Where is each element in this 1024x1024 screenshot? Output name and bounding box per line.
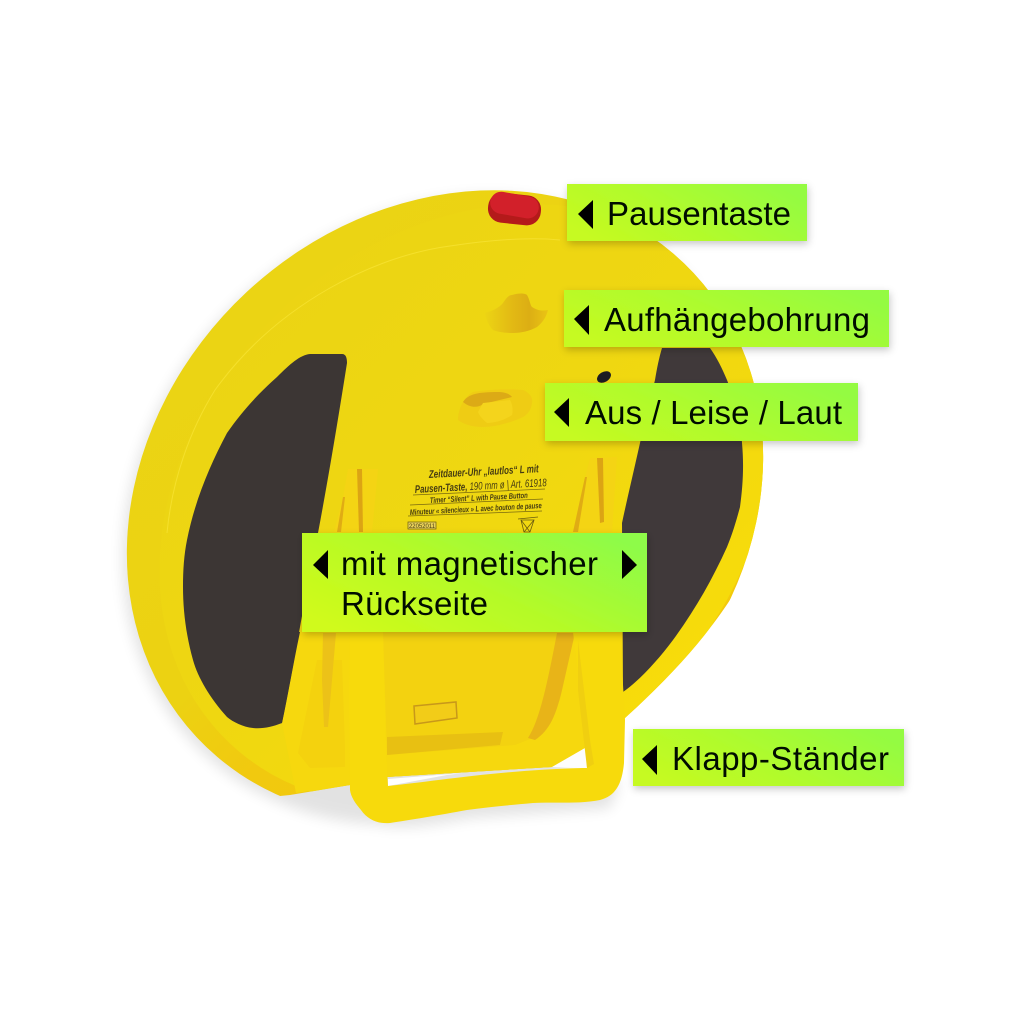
arrow: Klapp-Ständer — [642, 745, 657, 775]
front face — [209, 241, 764, 792]
lower left strut recess — [298, 633, 345, 768]
label: Aufhängebohrung — [564, 290, 889, 347]
small dark hole — [595, 369, 613, 385]
label: Aufhängebohrung: Aufhängebohrung — [604, 301, 870, 338]
arrow: Aufhängebohrung — [574, 305, 589, 335]
plate shading bands — [383, 632, 575, 755]
hanging hole — [485, 294, 548, 333]
right strut — [573, 457, 617, 532]
label: mit magnetischer Rückseite: mit magnetischer — [341, 545, 598, 582]
product text: Timer “Silent” L with Pause Button — [430, 491, 528, 505]
re-drawn left panel lower tip — [240, 632, 300, 728]
pause button — [487, 190, 542, 227]
stand inner plate — [282, 632, 622, 793]
right magnet panel — [622, 348, 743, 692]
product text — [410, 463, 548, 517]
arrow: Aus / Leise / Laut — [554, 398, 569, 427]
label: Klapp-Ständer: Klapp-Ständer — [672, 740, 889, 777]
label: mit magnetischer Rückseite: Rückseite — [341, 585, 488, 622]
outer rim — [126, 190, 764, 796]
product text: Pausen-Taste, 190 mm ø | Art. 61918 — [415, 477, 548, 496]
clock body — [126, 190, 764, 796]
label: Klapp-Ständer — [633, 729, 904, 786]
stand catch — [414, 702, 457, 724]
label: mit magnetischer Rückseite — [302, 533, 647, 632]
left strut — [334, 469, 378, 532]
recycling icon — [518, 517, 538, 532]
label: Pausentaste — [567, 184, 807, 241]
body rim line — [167, 239, 560, 533]
frame inner ridge right — [578, 640, 594, 768]
arrow: left — [313, 550, 328, 579]
left magnet panel — [183, 354, 347, 728]
article code box: 22052011 — [409, 523, 435, 530]
label: Aus / Leise / Laut — [545, 383, 858, 441]
arrow: Pausentaste — [578, 200, 593, 229]
white gap right — [552, 748, 587, 768]
slide switch — [458, 389, 532, 427]
product text: Zeitdauer-Uhr „lautlos“ L mit — [428, 463, 540, 481]
product text: Minuteur « silencieux » L avec bouton de pause — [410, 501, 542, 517]
text rules — [408, 489, 545, 516]
white gap left — [388, 773, 463, 786]
arrow: right — [622, 550, 637, 579]
clock illustration — [120, 190, 764, 830]
soft shadow behind clock — [120, 220, 620, 830]
label: Aus / Leise / Laut: Aus / Leise / Laut — [585, 394, 842, 431]
label: Pausentaste: Pausentaste — [607, 195, 791, 232]
folding stand frame — [349, 632, 625, 823]
